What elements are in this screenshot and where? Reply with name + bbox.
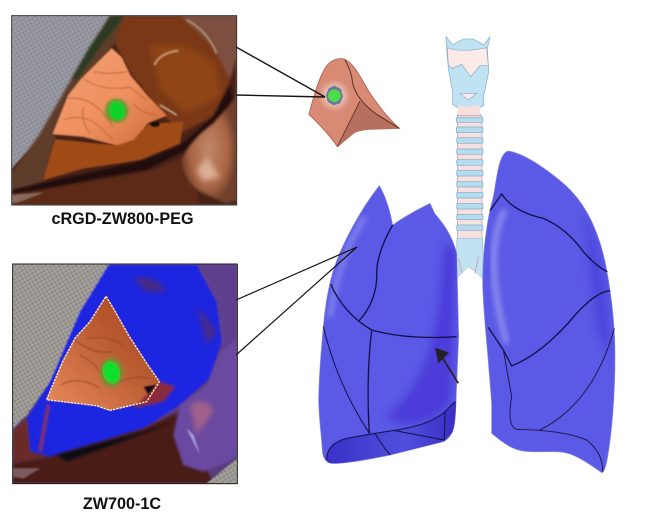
icon: excised lung lobe with tumor <box>309 59 399 147</box>
trachea <box>446 37 490 279</box>
arrow pointing to lung lesion <box>435 348 458 383</box>
left lung (image right) <box>483 151 615 473</box>
right lung (image left) <box>319 186 459 465</box>
photo: ZW700-1C lung with blue background <box>13 264 237 484</box>
connector lines: top photo to excised lobe <box>236 47 325 97</box>
fissure lines <box>331 225 457 433</box>
fissure lines <box>488 194 610 366</box>
photo: cRGD-ZW800-PEG lung lobe <box>12 16 237 205</box>
tracheal rings and lower bifurcation <box>456 116 483 279</box>
label: cRGD-ZW800-PEG: cRGD-ZW800-PEG <box>51 210 194 228</box>
connector lines: bottom photo to lung <box>236 247 357 355</box>
label: ZW700-1C: ZW700-1C <box>83 495 161 513</box>
